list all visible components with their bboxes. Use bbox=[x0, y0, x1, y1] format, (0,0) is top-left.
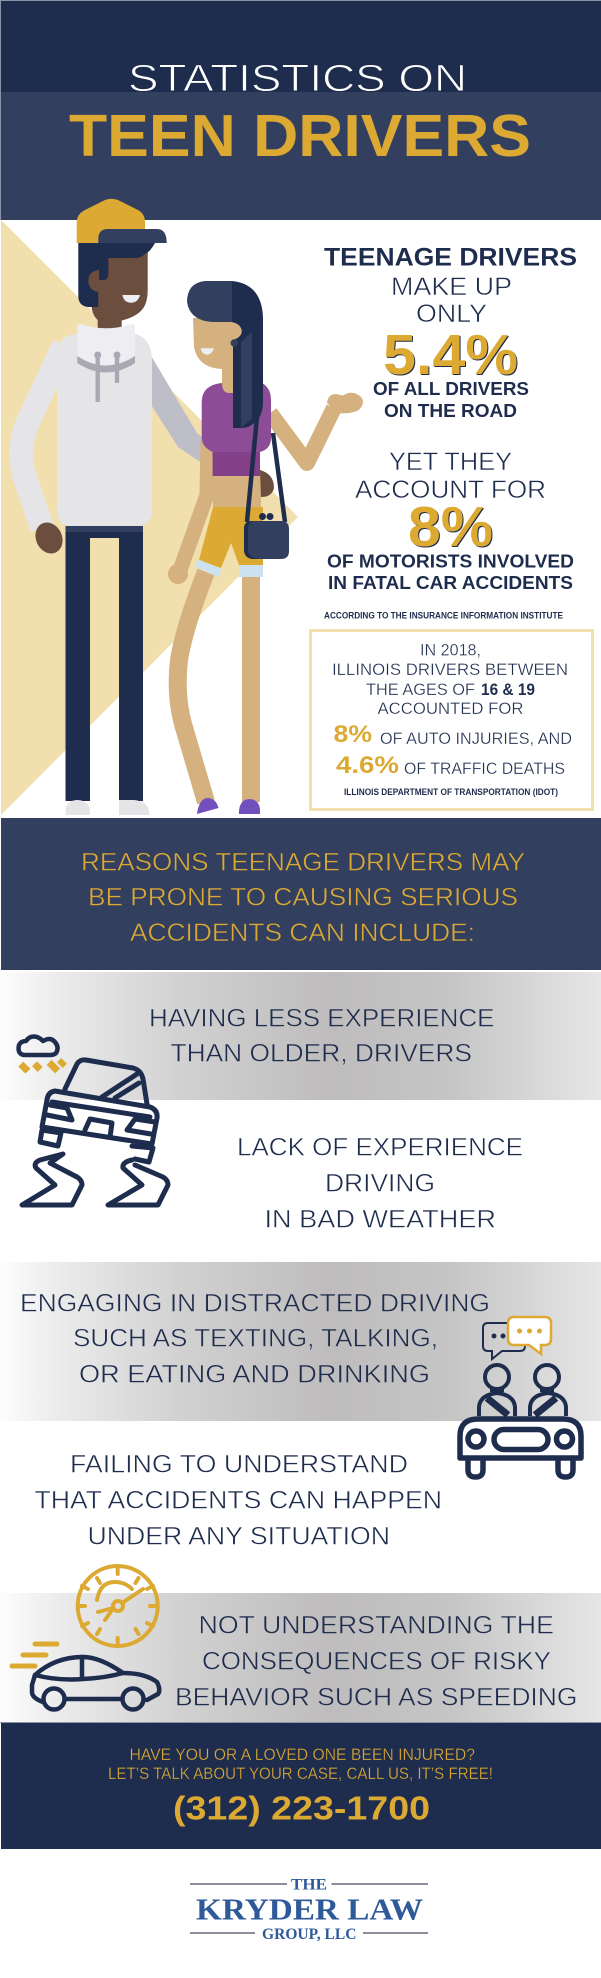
logo: The Kryder Law Group: THE bbox=[291, 1876, 327, 1894]
panel: reason three, distracted driving: OR EATING AND DRINKING bbox=[79, 1361, 430, 1389]
logo: The Kryder Law Group: GROUP, LLC bbox=[262, 1926, 356, 1943]
statistic 8% of auto injuries bbox=[334, 721, 572, 748]
girl purple top bbox=[202, 383, 271, 476]
panel: reason one, less experience: HAVING LESS EXPERIENCE bbox=[149, 1005, 494, 1033]
text block: reason four, any situation: THAT ACCIDENTS CAN HAPPEN bbox=[34, 1486, 442, 1514]
boy shoes bbox=[66, 800, 90, 815]
statistic 5.4%: 5.4% bbox=[383, 323, 518, 387]
panel: reason five, risky behavior: CONSEQUENCES OF RISKY bbox=[202, 1647, 551, 1675]
callout: Illinois statistics box: 16 & 19 bbox=[481, 680, 535, 699]
panel: reason three, distracted driving bbox=[0, 1262, 601, 1421]
girl earring bbox=[230, 339, 238, 347]
statistic 8%: 8% bbox=[409, 496, 494, 560]
boy smile bbox=[122, 295, 140, 303]
panel: reasons heading bbox=[1, 818, 601, 970]
icon: rain drops bbox=[18, 1058, 67, 1074]
text block: fatal accidents statistic bbox=[324, 448, 574, 622]
girl hair bbox=[187, 281, 232, 322]
icon: car front bbox=[460, 1419, 581, 1477]
boy left arm bbox=[21, 345, 64, 528]
girl right arm bbox=[270, 408, 334, 463]
statistic 4.6% of traffic deaths bbox=[336, 752, 565, 779]
text block: fatal accidents statistic: YET THEY bbox=[389, 448, 512, 476]
text block: reason four, any situation: FAILING TO UNDERSTAND bbox=[70, 1450, 408, 1478]
text block: reason two, bad weather: IN BAD WEATHER bbox=[264, 1206, 496, 1234]
icon: navy speech bubble bbox=[483, 1323, 525, 1359]
text block: reason two, bad weather: DRIVING bbox=[325, 1170, 435, 1198]
girl smile bbox=[201, 348, 214, 355]
text block: fatal accidents statistic: IN FATAL CAR ACCIDENTS bbox=[328, 572, 573, 593]
boy hood collar bbox=[77, 324, 135, 366]
panel: reason one, less experience bbox=[0, 972, 601, 1100]
panel: call to action footer: LET’S TALK ABOUT YOUR CASE, CALL US, IT’S FREE! bbox=[108, 1764, 493, 1783]
source note: ACCORDING TO THE INSURANCE INFORMATION INSTITUTE bbox=[324, 610, 563, 622]
icon: skidding car bbox=[22, 1060, 168, 1205]
panel: reasons heading: BE PRONE TO CAUSING SERIOUS bbox=[88, 884, 518, 912]
girl shoes bbox=[197, 798, 218, 814]
text block: reason two, bad weather: LACK OF EXPERIENCE bbox=[237, 1134, 523, 1162]
panel: call to action footer bbox=[0, 1722, 601, 1849]
boy neck and face bbox=[92, 245, 148, 335]
logo: The Kryder Law Group: KRYDER LAW bbox=[196, 1891, 423, 1926]
phone number: (312) 223-1700 bbox=[173, 1789, 430, 1826]
panel: call to action footer: HAVE YOU OR A LOVED ONE BEEN INJURED? bbox=[130, 1745, 475, 1764]
boy ear bbox=[88, 270, 99, 292]
title line two: TEEN DRIVERS bbox=[69, 103, 531, 169]
panel: reason three, distracted driving: SUCH AS TEXTING, TALKING, bbox=[73, 1325, 438, 1353]
girl arm down bbox=[180, 440, 208, 570]
icon: car outline bbox=[32, 1657, 159, 1710]
icon: car skidding in rain bbox=[18, 1036, 168, 1205]
boy hair bbox=[78, 243, 155, 307]
text block: fatal accidents statistic: ACCOUNT FOR bbox=[355, 476, 546, 504]
bag bbox=[244, 521, 289, 559]
logo: The Kryder Law Group bbox=[190, 1876, 428, 1943]
boy cap bbox=[77, 199, 145, 243]
callout: Illinois statistics box: ACCOUNTED FOR bbox=[378, 699, 524, 718]
girl face and neck bbox=[193, 318, 242, 393]
girl hand behind bbox=[260, 470, 274, 497]
girl raised hand bbox=[327, 393, 363, 413]
icon: speed lines bbox=[12, 1644, 57, 1666]
text block: teenage drivers statistic: TEENAGE DRIVERS bbox=[324, 244, 577, 272]
panel: reasons heading: ACCIDENTS CAN INCLUDE: bbox=[130, 919, 475, 947]
panel: reason one, less experience: THAN OLDER, DRIVERS bbox=[170, 1040, 472, 1068]
boy hood strings bbox=[94, 352, 120, 402]
panel: title header bbox=[0, 0, 601, 220]
statistic 8% of auto injuries: OF AUTO INJURIES, AND bbox=[380, 729, 572, 748]
girl shorts bbox=[199, 507, 263, 568]
bag straps bbox=[247, 417, 285, 522]
callout: Illinois statistics box bbox=[310, 630, 592, 810]
text block: teenage drivers statistic: MAKE UP bbox=[391, 273, 512, 301]
text block: reason four, any situation: UNDER ANY SITUATION bbox=[88, 1522, 390, 1550]
icon: speedometer bbox=[78, 1566, 158, 1646]
bag clasp bbox=[259, 513, 266, 520]
source note: ILLINOIS DEPARTMENT OF TRANSPORTATION (IDOT) bbox=[344, 787, 558, 798]
illustration: girl with bag bbox=[168, 281, 363, 814]
icon: passengers bbox=[479, 1365, 566, 1416]
boy cap visor bbox=[98, 229, 167, 243]
icon: rain cloud bbox=[19, 1036, 58, 1055]
text block: teenage drivers statistic bbox=[324, 244, 577, 421]
background: pale yellow diamond bbox=[1, 220, 298, 815]
girl right leg bbox=[242, 570, 260, 802]
panel: reason five, risky behavior: NOT UNDERSTANDING THE bbox=[198, 1611, 554, 1639]
girl left leg bbox=[178, 572, 206, 802]
text block: reason four, any situation bbox=[34, 1450, 442, 1550]
boy hand bbox=[30, 518, 68, 558]
statistic 8%: 8% bbox=[408, 495, 493, 559]
panel: reason five, risky behavior: BEHAVIOR SUCH AS SPEEDING bbox=[175, 1684, 578, 1712]
statistic 5.4%: 5.4% bbox=[384, 324, 519, 388]
icon: speeding car bbox=[12, 1644, 159, 1710]
boy hoodie body bbox=[57, 334, 152, 526]
callout: Illinois statistics box: THE AGES OF bbox=[366, 680, 475, 699]
girl shorts cuffs bbox=[196, 559, 222, 577]
text block: fatal accidents statistic: OF MOTORISTS INVOLVED bbox=[327, 550, 574, 572]
text block: reason two, bad weather bbox=[237, 1134, 523, 1234]
illustration: boy in hoodie bbox=[21, 199, 202, 815]
text block: teenage drivers statistic: ON THE ROAD bbox=[384, 400, 517, 421]
text block: teenage drivers statistic: ONLY bbox=[416, 300, 487, 328]
panel: reasons heading: REASONS TEENAGE DRIVERS MAY bbox=[81, 848, 525, 876]
text block: teenage drivers statistic: OF ALL DRIVERS bbox=[373, 378, 529, 399]
icon: two people talking in a car bbox=[460, 1317, 581, 1477]
statistic 4.6% of traffic deaths: OF TRAFFIC DEATHS bbox=[404, 759, 565, 778]
callout: Illinois statistics box: ILLINOIS DRIVERS BETWEEN bbox=[332, 660, 568, 679]
icon: gold speech bubble bbox=[508, 1317, 551, 1354]
panel: reason three, distracted driving: ENGAGING IN DISTRACTED DRIVING bbox=[20, 1290, 490, 1318]
girl torso and waist bbox=[213, 470, 261, 510]
statistic 8% of auto injuries: 8% bbox=[334, 721, 372, 748]
callout: Illinois statistics box: IN 2018, bbox=[420, 640, 481, 660]
statistic 4.6% of traffic deaths: 4.6% bbox=[336, 752, 399, 779]
panel: reason five, risky behavior bbox=[0, 1593, 601, 1722]
boy trousers bbox=[66, 526, 143, 801]
title line one: STATISTICS ON bbox=[128, 58, 467, 100]
boy right arm bbox=[150, 354, 202, 463]
